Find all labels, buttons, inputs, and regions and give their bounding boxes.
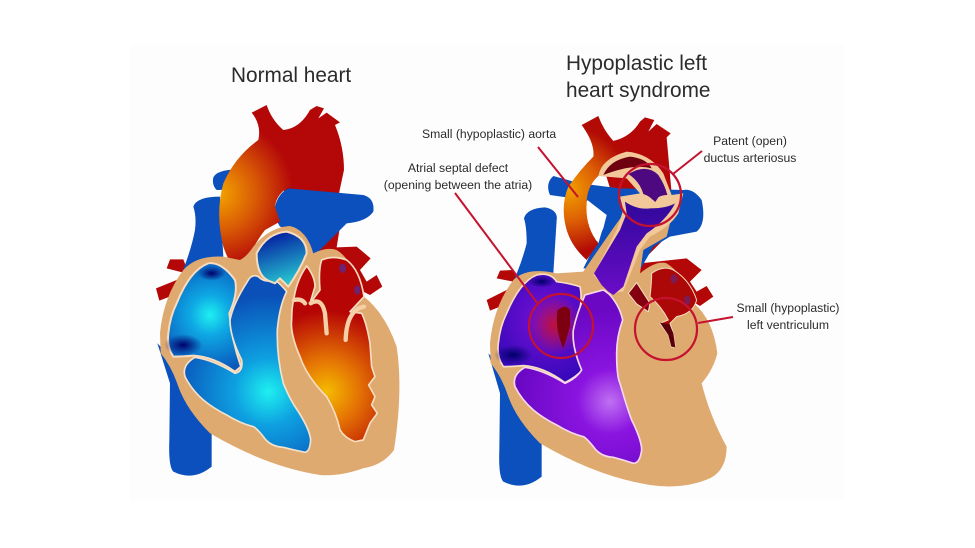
great vessels: red pulmonary veins and arch: [603, 117, 713, 306]
atrial septal defect opening: [557, 307, 570, 348]
ductus arteriosus: [628, 169, 667, 202]
heart muscle body: [490, 210, 727, 486]
annotation: aorta: Small (hypoplastic) aorta: [422, 127, 556, 141]
chamber: right atrium: [168, 263, 241, 372]
annotation: patent ductus arteriosus: ductus arteriosus: [704, 151, 796, 165]
illustration: hypoplastic heart: [487, 116, 727, 486]
vessel: small aorta: [564, 116, 627, 260]
vessel: superior vena cava and inferior vena cava: [173, 197, 223, 293]
vessel: vena cavae: [503, 207, 557, 303]
heading: hypoplastic left heart syndrome: heart syndrome: [566, 79, 710, 102]
chamber: right ventricle: [184, 276, 311, 452]
annotation: patent ductus arteriosus: Patent (open): [713, 134, 787, 148]
annotation: atrial septal defect: [384, 161, 593, 358]
annotation: aorta: [422, 127, 578, 197]
annotation: atrial septal defect: Atrial septal defect: [408, 161, 508, 175]
chamber: hypoplastic left atrium: [628, 283, 650, 312]
vessel: aorta: [219, 105, 308, 275]
great vessels: pulmonary veins and back of arch: [273, 106, 382, 295]
papillary muscle strands: [294, 300, 364, 340]
dark left ventricle cavity: [660, 323, 675, 347]
annotation: small left ventricle: [635, 298, 839, 360]
annotation: small left ventricle: left ventriculum: [747, 318, 829, 332]
annotation: patent ductus arteriosus: [619, 134, 796, 226]
chamber: left ventricle and left atrium: [291, 257, 377, 442]
heading: normal heart: Normal heart: [231, 64, 351, 87]
annotation: small left ventricle: Small (hypoplastic): [737, 301, 839, 315]
annotation: atrial septal defect: (opening between the atria): [384, 178, 532, 192]
chamber: right atrium with defect: [498, 274, 582, 383]
chamber: pulmonary conus: [257, 232, 307, 287]
chamber: dark arch: [603, 157, 652, 175]
heading: hypoplastic left heart syndrome: Hypoplastic left: [566, 52, 707, 75]
chamber: right ventricle: [514, 290, 642, 463]
pulmonary trunk: [594, 202, 675, 295]
vessel: pulmonary artery: [213, 169, 374, 260]
ductus arch outline: [593, 152, 683, 293]
vessel: pulmonary artery: [548, 176, 703, 270]
heart muscle body: [160, 226, 399, 475]
illustration: normal heart: [156, 105, 399, 476]
